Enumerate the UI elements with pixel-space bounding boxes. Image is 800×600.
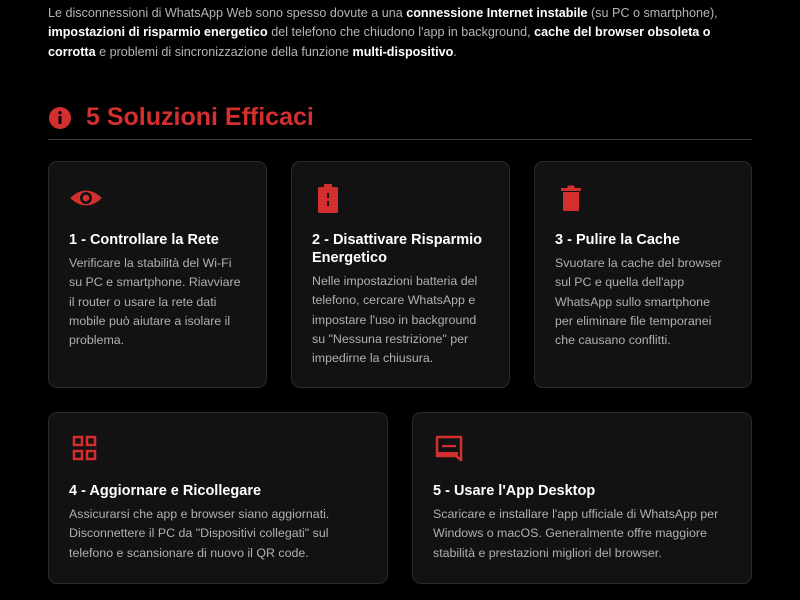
card 1: Verificare la stabilità del Wi-Fi su PC e smartphone. Riavviare il router o usare la rete dati mobile può aiutare a isolare il problema. [69,256,240,347]
card 5: Scaricare e installare l'app ufficiale di WhatsApp per Windows o macOS. Generalmente offre maggiore stabilità e prestazioni migliori del browser. [433,507,718,560]
card 3: 3 - Pulire la Cache [555,232,680,248]
card 5 [412,412,752,584]
card 4: 4 - Aggiornare e Ricollegare [69,483,261,499]
card 2 [291,161,510,388]
icon: grid [72,436,96,460]
icon: eye [70,190,102,206]
card 5: 5 - Usare l'App Desktop [433,483,595,499]
heading: 5 Soluzioni Efficaci [86,103,314,131]
card 3 [534,161,752,388]
card 1 [48,161,267,388]
card 4: Assicurarsi che app e browser siano aggiornati. Disconnettere il PC da "Dispositivi collegati" sul telefono e scansionare di nuovo il QR code. [69,507,329,560]
card 2: Nelle impostazioni batteria del telefono, cercare WhatsApp e impostare l'uso in background su "Nessuna restrizione" per impedirne la chiusura. [312,274,477,365]
intro text: Le disconnessioni di WhatsApp Web sono spesso dovute a una connessione Internet instabile (su PC o smartphone), impostazioni di risparmio energetico del telefono che chiudono l'app in background, cache del browser obsoleta o corrotta e problemi di sincronizzazione della funzione multi-dispositivo. [48,6,718,59]
card 2: 2 - Disattivare Risparmio Energetico [312,232,482,266]
icon: trash [561,186,581,211]
card 3: Svuotare la cache del browser sul PC e quella dell'app WhatsApp sullo smartphone per eliminare file temporanei che causano conflitti. [555,256,722,347]
icon: message [436,436,462,462]
card 4 [48,412,388,584]
icon: battery [318,184,338,213]
card 1: 1 - Controllare la Rete [69,232,219,248]
